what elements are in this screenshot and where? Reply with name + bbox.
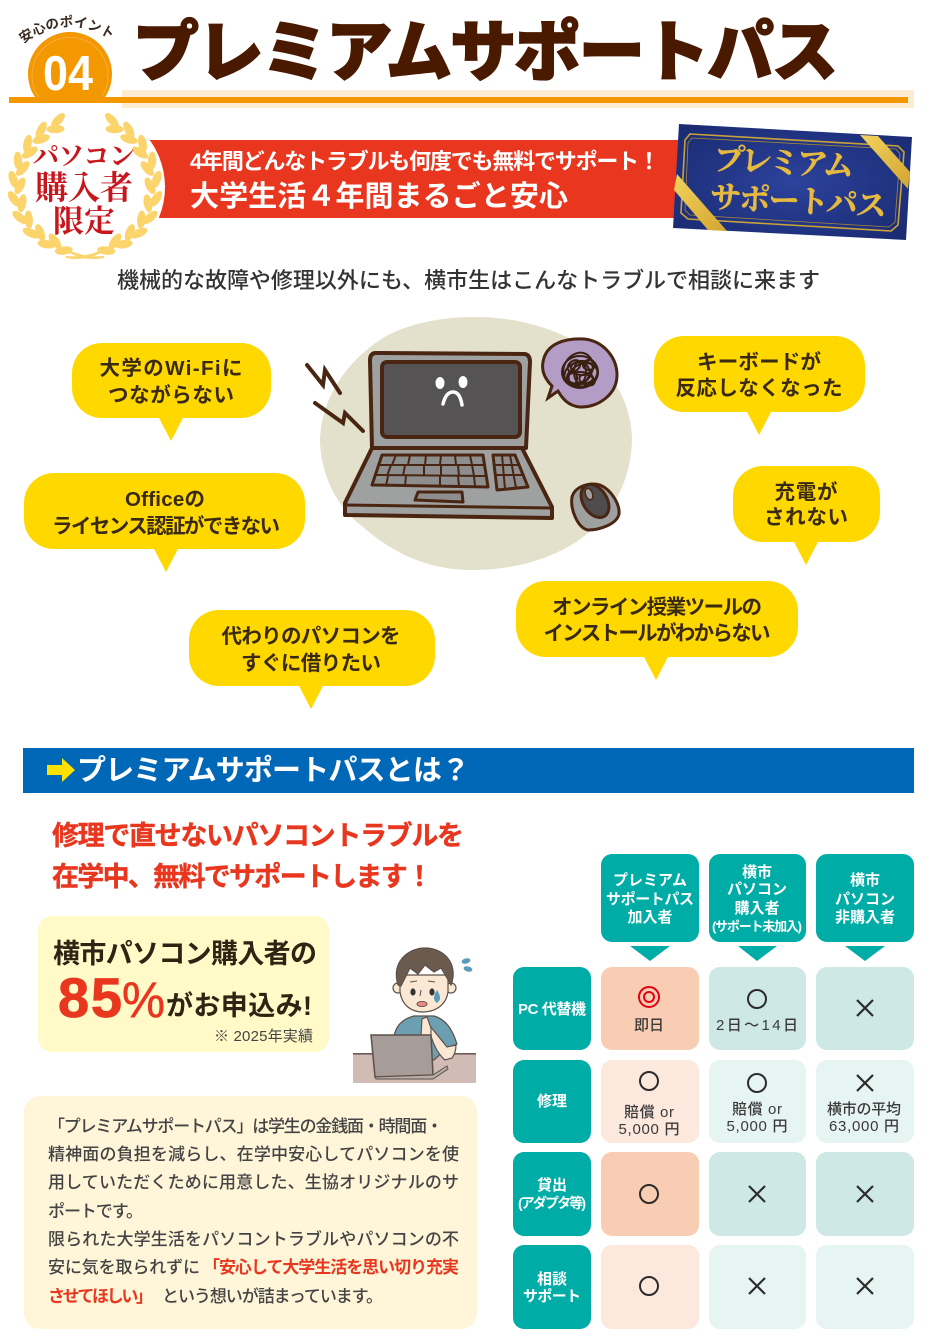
speech bubble: Office license: Officeの (125, 488, 205, 511)
row: repair: 横市の平均 (827, 1100, 901, 1118)
row: repair: 賠償 or (732, 1101, 782, 1118)
speech bubble: Wi-Fi: 大学のWi-Fiに (100, 357, 242, 380)
row: PC loaner: PC 代替機 (518, 1000, 586, 1018)
column header: premium members: プレミアム (613, 872, 687, 889)
row: PC loaner: 2日～14日 (716, 1017, 798, 1034)
description panel: 安に気を取られずに (48, 1258, 200, 1277)
callout: 85%: % (122, 972, 165, 1028)
description panel: という想いが詰まっています。 (162, 1286, 383, 1306)
banner: red band (150, 140, 682, 218)
speech bubble: charging: 充電が (774, 480, 838, 504)
speech bubble: Office license: ライセンス認証ができない (52, 514, 280, 538)
red headline (52, 820, 464, 892)
row: consultation: 相談 (537, 1270, 567, 1288)
description panel: 限られた大学生活をパソコントラブルやパソコンの不 (48, 1229, 459, 1249)
description panel: 精神面の負担を減らし、在学中安心してパソコンを使 (48, 1145, 459, 1164)
column header: non-purchasers: パソコン (835, 891, 895, 908)
section heading bar: プレミアムサポートパスとは？ (77, 754, 470, 787)
row: rental (513, 1152, 914, 1236)
description panel: 用していただくために用意した、生協オリジナルのサ (48, 1173, 459, 1192)
column header: premium members: 加入者 (627, 909, 673, 926)
badge: point 04: 04 (43, 47, 93, 101)
badge: laurel wreath: 購入者 (35, 170, 133, 207)
description panel: 「プレミアムサポートパス」は学生の金銭面・時間面・ (48, 1117, 443, 1136)
callout: 85%: ※ 2025年実績 (214, 1028, 313, 1045)
illustration: broken laptop (307, 317, 632, 570)
speech bubble: loaner PC (189, 610, 435, 709)
speech bubble: Office license (24, 473, 305, 572)
callout: 85%: 85 (58, 966, 122, 1029)
row: rental: 貸出 (537, 1176, 567, 1194)
speech bubble: charging (733, 466, 880, 565)
laptop (345, 353, 552, 518)
speech bubble: charging: されない (764, 506, 848, 529)
row: rental: (アダプタ等) (518, 1195, 586, 1211)
sad face (436, 376, 468, 405)
badge: premium pass ticket: プレミアム (713, 141, 855, 184)
speech bubble: loaner PC: 代わりのパソコンを (222, 625, 400, 648)
column header: PC purchasers: (サポート未加入) (712, 919, 802, 934)
header (9, 14, 914, 108)
row: repair: 5,000 円 (726, 1118, 788, 1135)
column header: PC purchasers: 横市 (742, 863, 772, 881)
speech bubble: Wi-Fi: つながらない (108, 383, 234, 407)
badge: laurel wreath (5, 107, 165, 267)
column header: premium members (601, 854, 699, 961)
red headline: 在学中、無料でサポートします！ (52, 862, 433, 892)
column header: PC purchasers (709, 854, 806, 961)
icon: arrow (47, 758, 75, 782)
column header: PC purchasers: 購入者 (734, 899, 780, 917)
speech bubble: keyboard: キーボードが (697, 350, 822, 374)
speech bubble: keyboard (654, 336, 865, 435)
column header: premium members: サポートパス (606, 891, 694, 908)
badge: laurel wreath: パソコン (33, 142, 135, 171)
badge: premium pass ticket (673, 124, 912, 240)
badge: point 04 (18, 14, 112, 101)
banner: red band: 4年間どんなトラブルも何度でも無料でサポート！ (190, 149, 660, 174)
callout: 85%: がお申込み! (166, 990, 312, 1021)
column header: non-purchasers: 横市 (850, 871, 880, 889)
description panel (24, 1096, 477, 1329)
illustration: worried student (353, 948, 476, 1083)
row: PC loaner (513, 967, 914, 1050)
speech bubble: online class tool: オンライン授業ツールの (552, 596, 762, 619)
red headline: 修理で直せないパソコントラブルを (52, 820, 464, 851)
row: repair (513, 1060, 914, 1143)
row: repair: 修理 (537, 1092, 567, 1110)
column header: non-purchasers: 非購入者 (835, 908, 895, 926)
speech bubble: keyboard: 反応しなくなった (676, 377, 842, 400)
row: consultation: サポート (523, 1288, 581, 1305)
row: repair: 5,000 円 (618, 1121, 680, 1138)
column header: PC purchasers: パソコン (727, 881, 787, 898)
badge: premium pass ticket: サポートパス (709, 179, 888, 224)
row: repair: 63,000 円 (829, 1118, 899, 1135)
subheading: 機械的な故障や修理以外にも、横市生はこんなトラブルで相談に来ます (117, 268, 820, 293)
thought bubble with scribble (543, 339, 617, 407)
callout: 85% (38, 916, 329, 1052)
description panel: ポートです。 (48, 1202, 143, 1221)
badge: point 04: 安心のポイント (18, 14, 112, 44)
badge: laurel wreath: 限定 (53, 204, 115, 239)
column header: non-purchasers (816, 854, 914, 961)
row: PC loaner: 即日 (634, 1017, 664, 1034)
speech bubble: loaner PC: すぐに借りたい (241, 652, 381, 675)
row: repair: 賠償 or (624, 1104, 674, 1121)
section heading bar (23, 748, 914, 793)
title: プレミアムサポートパス (133, 15, 838, 89)
speech bubble: online class tool: インストールがわからない (544, 621, 770, 645)
speech bubble: Wi-Fi (72, 343, 271, 441)
row: consultation (513, 1245, 914, 1329)
callout: 85%: 横市パソコン購入者の (53, 939, 317, 969)
comparison table (513, 854, 914, 1329)
description panel: させてほしい」 (48, 1287, 153, 1306)
description panel: 「安心して大学生活を思い切り充実 (203, 1257, 459, 1277)
icon: lightning (307, 365, 363, 431)
speech bubble: online class tool (516, 581, 798, 680)
mouse (572, 479, 619, 530)
banner: red band: 大学生活４年間まるごと安心 (190, 179, 568, 213)
